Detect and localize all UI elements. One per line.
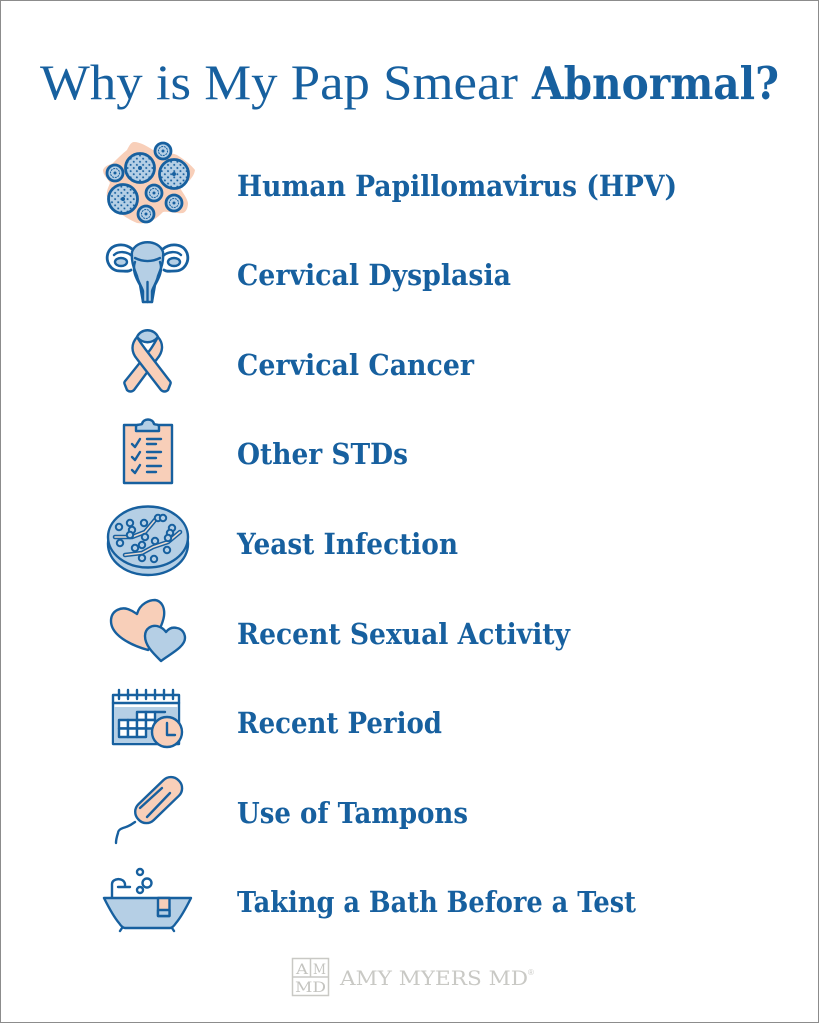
- label: recent period: Recent Period: [237, 706, 442, 740]
- label: cervical cancer: Cervical Cancer: [237, 348, 475, 382]
- icon: bathtub: [104, 869, 191, 931]
- label: use of tampons: Use of Tampons: [237, 796, 468, 830]
- logo: Amy Myers MD: MD: [295, 980, 326, 996]
- title: Why is My Pap Smear: [40, 54, 518, 110]
- logo: Amy Myers MD: [292, 958, 534, 996]
- title: [40, 54, 779, 110]
- icon: two hearts: [111, 600, 185, 661]
- icon: calendar with clock: [113, 690, 182, 747]
- icon: HPV virus cells: [103, 142, 195, 223]
- icon: awareness ribbon: [124, 330, 171, 392]
- label: bath before test: Taking a Bath Before a Test: [237, 885, 637, 919]
- logo: Amy Myers MD: ®: [528, 968, 534, 977]
- icon: petri dish: [108, 506, 188, 575]
- label: cervical dysplasia: Cervical Dysplasia: [237, 258, 511, 292]
- label: HPV: Human Papillomavirus (HPV): [237, 169, 677, 203]
- logo: Amy Myers MD: M: [313, 962, 326, 978]
- icon: clipboard checklist: [124, 420, 172, 483]
- icon: uterus: [107, 242, 188, 302]
- label: recent sexual activity: Recent Sexual Activity: [237, 617, 571, 651]
- label: other STDs: Other STDs: [237, 437, 408, 471]
- title: Abnormal?: [531, 57, 779, 110]
- icon: tampon: [116, 773, 186, 843]
- logo: Amy Myers MD: AMY MYERS MD: [339, 966, 528, 990]
- logo: Amy Myers MD: A: [295, 962, 309, 978]
- label: yeast infection: Yeast Infection: [236, 527, 458, 561]
